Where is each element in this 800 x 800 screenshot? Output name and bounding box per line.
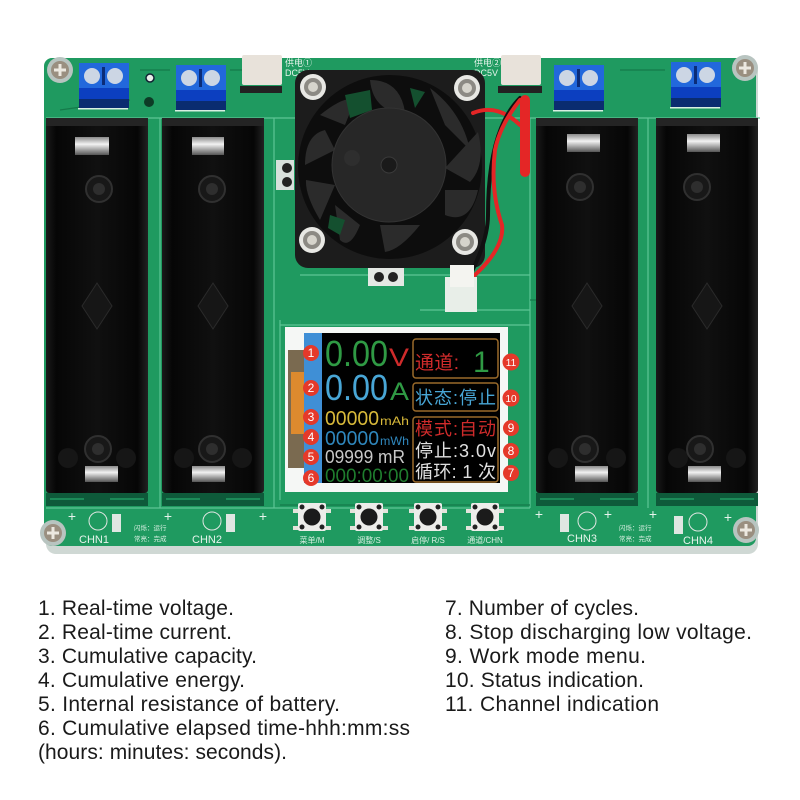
feature list right: 9. Work mode menu.: [445, 645, 646, 668]
battery holder 4: [656, 118, 758, 506]
channel labels: CHN1: [79, 534, 109, 546]
terminal block 3: [553, 65, 604, 112]
plus marks: [68, 506, 732, 525]
mode box: 循环: 1 次: [415, 462, 496, 482]
energy reading: mWh: [380, 434, 409, 448]
feature list right: [445, 597, 752, 716]
plus marks: +: [649, 506, 657, 522]
status box: [413, 383, 498, 411]
numbered markers: 2: [308, 381, 315, 395]
USB-C port left: [240, 55, 282, 93]
status notes: [134, 523, 652, 543]
port labels: 供电②: [474, 57, 501, 68]
status notes: 常亮：完成: [619, 534, 652, 543]
plus marks: +: [259, 508, 267, 524]
voltage reading: V: [389, 344, 409, 372]
feature list right: 7. Number of cycles.: [445, 597, 639, 620]
plus marks: +: [68, 508, 76, 524]
numbered markers: 1: [308, 346, 315, 360]
channel box: 通道:: [415, 352, 459, 374]
screen: [304, 333, 500, 483]
channel labels: CHN4: [683, 535, 713, 547]
small pad: [276, 160, 294, 190]
channel box: 1: [473, 346, 490, 379]
channel labels: [79, 533, 713, 547]
feature list right: 10. Status indication.: [445, 669, 644, 692]
small hole: [144, 74, 154, 107]
plus marks: +: [604, 506, 612, 522]
current reading: A: [390, 378, 409, 406]
feature list right: 11. Channel indication: [445, 693, 659, 716]
battery holder 2: [162, 118, 264, 506]
feature list left: 2. Real-time current.: [38, 621, 232, 644]
feature list left: 3. Cumulative capacity.: [38, 645, 257, 668]
numbered markers: 8: [508, 444, 515, 458]
button labels: 启停/ R/S: [411, 535, 445, 545]
port labels: DC5V: [474, 68, 498, 78]
terminal block 4: [670, 62, 721, 108]
port labels: [285, 57, 501, 78]
numbered markers: 7: [508, 466, 515, 480]
numbered markers: 9: [508, 421, 515, 435]
port labels: 供电①: [285, 57, 312, 68]
feature list left: (hours: minutes: seconds).: [38, 741, 287, 764]
channel box: [413, 339, 498, 379]
feature list left: [38, 597, 410, 764]
button labels: 菜单/M: [300, 535, 325, 545]
resistance reading: 09999 mR: [325, 447, 405, 467]
plus marks: +: [535, 506, 543, 522]
energy reading: 00000: [325, 428, 379, 450]
feature list left: 4. Cumulative energy.: [38, 669, 245, 692]
capacity reading: [325, 408, 409, 430]
silkscreen pad: [368, 268, 404, 286]
status box: 状态:停止: [415, 388, 496, 408]
battery holder 3: [536, 118, 638, 506]
battery holder 1: [46, 118, 148, 506]
channel labels: CHN3: [567, 533, 597, 545]
numbered markers: 4: [308, 430, 315, 444]
fan wires: [462, 98, 525, 290]
terminal block 1: [78, 63, 129, 110]
status notes: 闪烁：运行: [619, 523, 652, 532]
capacity reading: mAh: [380, 414, 409, 428]
LED indicators: [89, 512, 707, 534]
USB-C port right: [498, 55, 542, 93]
numbered markers: 6: [308, 471, 315, 485]
feature list left: 6. Cumulative elapsed time-hhh:mm:ss: [38, 717, 410, 740]
button labels: 通道/CHN: [467, 535, 503, 545]
numbered markers: 3: [308, 410, 315, 424]
fan: [295, 70, 485, 268]
elapsed time reading: 000:00:00: [325, 466, 409, 487]
feature list left: 1. Real-time voltage.: [38, 597, 234, 620]
mode box: 停止:3.0v: [415, 441, 496, 461]
mode box: 模式:自动: [415, 419, 496, 439]
button labels: [300, 535, 503, 545]
plus marks: +: [724, 509, 732, 525]
channel labels: CHN2: [192, 534, 222, 546]
green PCB: [44, 58, 756, 546]
status notes: 闪烁：运行: [134, 523, 167, 532]
numbered markers: 5: [308, 450, 315, 464]
numbered markers: [303, 345, 520, 486]
corner screws: [40, 55, 759, 546]
port labels: DC5V: [285, 68, 309, 78]
capacity reading: 00000: [325, 408, 379, 430]
energy reading: [325, 428, 409, 450]
plus marks: +: [164, 508, 172, 524]
voltage reading: 0.00: [325, 333, 388, 374]
button labels: 调整/S: [357, 535, 381, 545]
feature list left: 5. Internal resistance of battery.: [38, 693, 340, 716]
circuit board photo: [40, 55, 760, 554]
push buttons: [293, 503, 504, 531]
numbered markers: 10: [505, 394, 517, 405]
numbered markers: 11: [506, 358, 517, 369]
current reading: 0.00: [325, 367, 388, 408]
LCD module: [285, 327, 508, 492]
terminal block 2: [175, 65, 226, 112]
status notes: 常亮：完成: [134, 534, 167, 543]
feature list right: 8. Stop discharging low voltage.: [445, 621, 752, 644]
mode box: [413, 417, 498, 482]
fan connector: [445, 265, 477, 312]
